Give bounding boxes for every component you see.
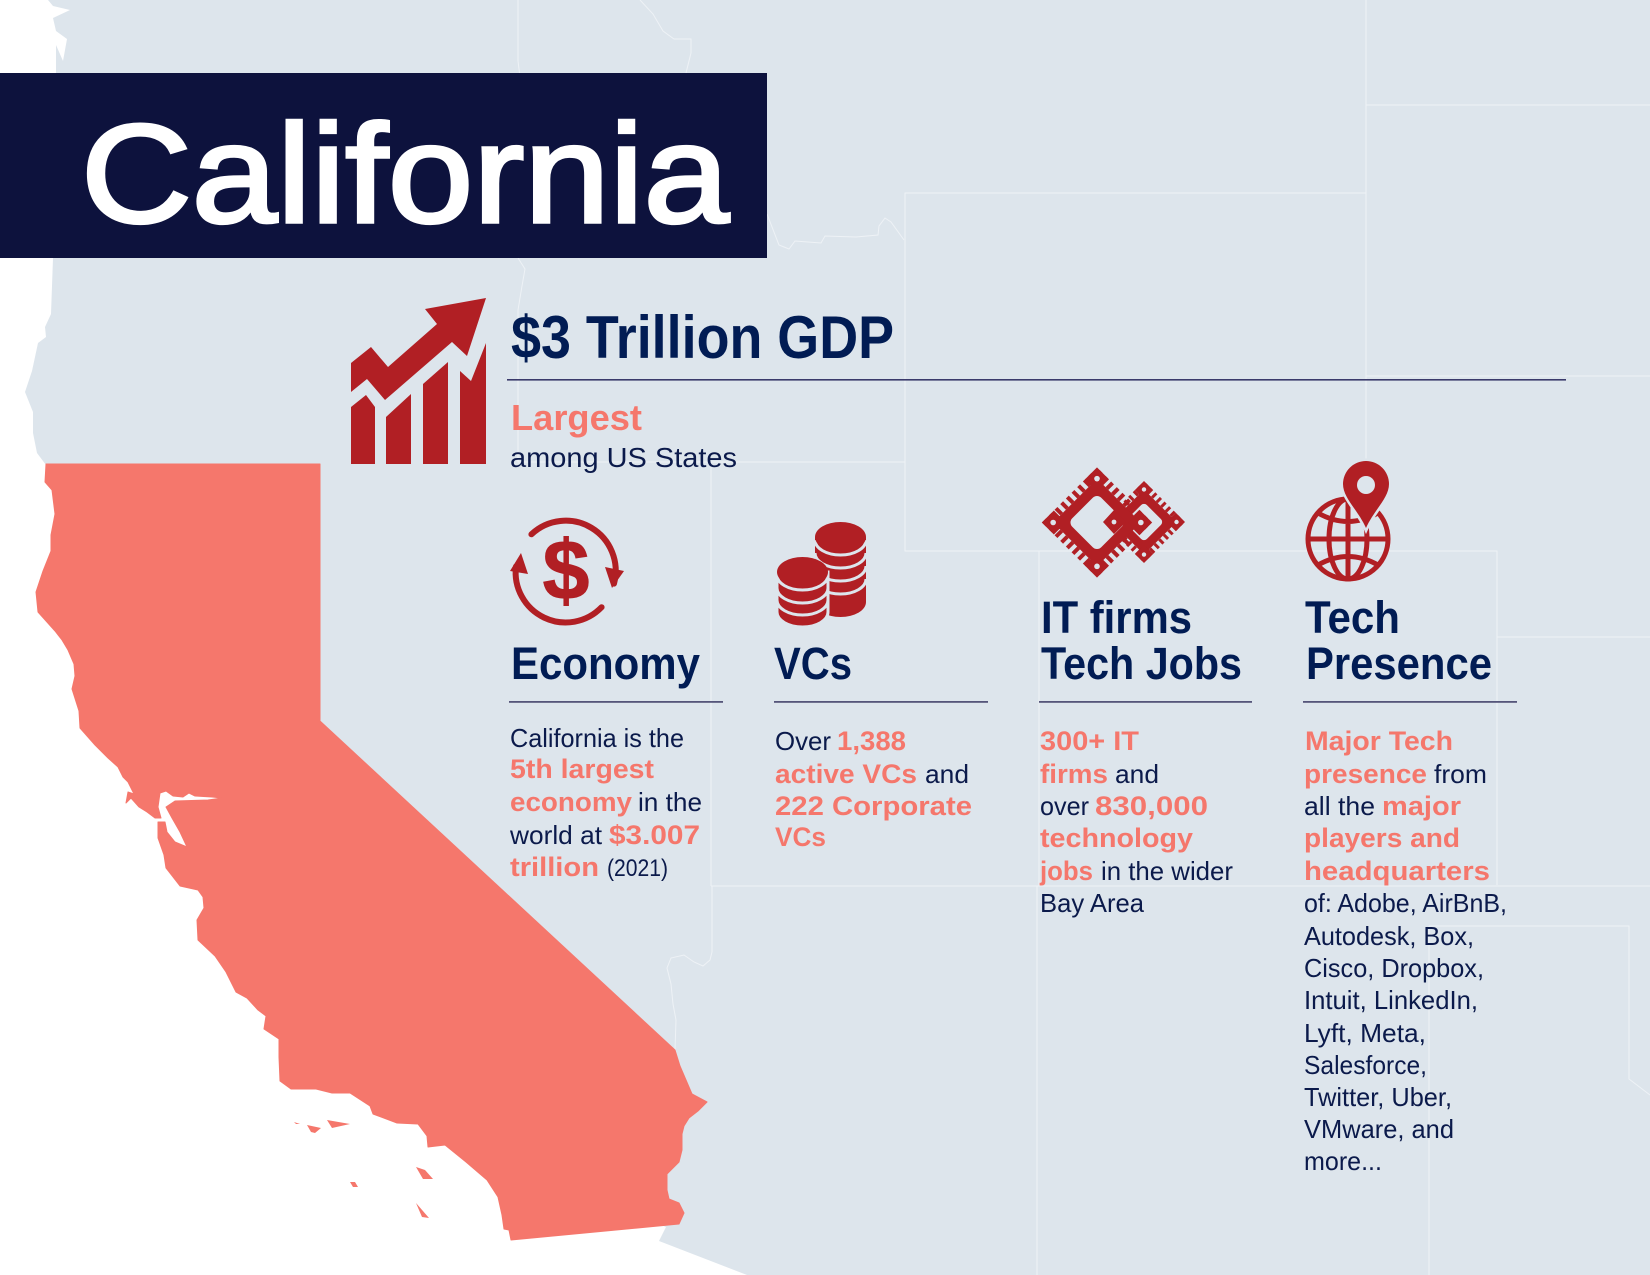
Tech Presence body bbox=[1304, 726, 1507, 1176]
Tech Presence body: Lyft, Meta, bbox=[1304, 1018, 1426, 1048]
map: California state bbox=[36, 464, 707, 1240]
IT firms heading: IT firms bbox=[1041, 592, 1192, 643]
Tech Presence body: of: Adobe, AirBnB, bbox=[1304, 888, 1507, 918]
Tech Presence body: Major Tech bbox=[1305, 726, 1453, 756]
IT firms body: Bay Area bbox=[1040, 888, 1145, 918]
title banner: California bbox=[81, 95, 729, 252]
Economy divider bbox=[509, 701, 723, 703]
icon: rising bar chart with arrow bbox=[351, 298, 486, 464]
title banner bbox=[0, 73, 767, 258]
column: Economy bbox=[509, 638, 723, 882]
Economy heading: Economy bbox=[511, 638, 700, 689]
Economy body: economy bbox=[510, 787, 632, 817]
Tech Presence body: all the bbox=[1304, 791, 1375, 821]
Economy body bbox=[509, 723, 702, 882]
IT firms divider bbox=[1039, 701, 1252, 703]
IT firms body bbox=[1039, 726, 1233, 918]
IT firms body: 830,000 bbox=[1095, 791, 1208, 821]
Tech Presence heading bbox=[1305, 592, 1492, 689]
IT firms body: 300+ IT bbox=[1040, 726, 1140, 756]
Tech Presence body: Autodesk, Box, bbox=[1304, 921, 1474, 951]
IT firms heading bbox=[1041, 592, 1242, 689]
VCs body: Over bbox=[775, 726, 831, 756]
icon: coin stacks bbox=[777, 522, 866, 627]
column: VCs bbox=[774, 638, 988, 852]
IT firms body: technology bbox=[1040, 823, 1193, 853]
Tech Presence divider bbox=[1303, 701, 1517, 703]
icon: linked microchips bbox=[1042, 467, 1185, 578]
Economy body: trillion bbox=[510, 852, 599, 882]
Tech Presence body: Salesforce, bbox=[1304, 1050, 1427, 1080]
VCs body: VCs bbox=[775, 822, 826, 852]
VCs heading: VCs bbox=[774, 638, 852, 689]
IT firms heading: Tech Jobs bbox=[1041, 638, 1242, 689]
GDP subtext bbox=[510, 397, 737, 473]
Tech Presence body: from bbox=[1434, 759, 1487, 789]
Tech Presence body: more... bbox=[1304, 1146, 1382, 1176]
VCs divider bbox=[774, 701, 988, 703]
IT firms body: and bbox=[1115, 759, 1159, 789]
Economy body: world at bbox=[509, 820, 603, 850]
column: IT firms and tech jobs bbox=[1039, 592, 1252, 918]
IT firms body: jobs bbox=[1039, 856, 1093, 886]
Economy body: $3.007 bbox=[609, 820, 700, 850]
icon: dollar with circular arrows: $ bbox=[543, 523, 589, 617]
VCs body bbox=[775, 726, 972, 852]
Tech Presence body: players and bbox=[1304, 823, 1460, 853]
column: Tech Presence bbox=[1303, 592, 1517, 1176]
Tech Presence body: headquarters bbox=[1304, 856, 1490, 886]
Tech Presence body: VMware, and bbox=[1304, 1114, 1454, 1144]
Economy body: California is the bbox=[510, 723, 684, 753]
VCs body: active VCs bbox=[775, 759, 917, 789]
Tech Presence heading: Presence bbox=[1306, 638, 1492, 689]
GDP subtext: Largest bbox=[511, 397, 642, 438]
Tech Presence body: Cisco, Dropbox, bbox=[1304, 953, 1484, 983]
Economy body: in the bbox=[638, 787, 702, 817]
Tech Presence body: Intuit, LinkedIn, bbox=[1304, 985, 1478, 1015]
Economy body: 5th largest bbox=[510, 754, 654, 784]
Tech Presence body: Twitter, Uber, bbox=[1304, 1082, 1452, 1112]
IT firms body: firms bbox=[1040, 759, 1108, 789]
Tech Presence heading: Tech bbox=[1305, 592, 1400, 643]
VCs body: 222 Corporate bbox=[775, 791, 972, 821]
GDP subtext: among US States bbox=[510, 442, 737, 473]
Tech Presence body: presence bbox=[1304, 759, 1427, 789]
GDP heading: $3 Trillion GDP bbox=[511, 304, 894, 371]
icon: globe with location pin bbox=[1308, 461, 1389, 579]
Economy body: (2021) bbox=[607, 855, 668, 882]
icon: dollar with circular arrows bbox=[510, 521, 624, 622]
VCs body: and bbox=[925, 759, 969, 789]
Tech Presence body: major bbox=[1382, 791, 1462, 821]
GDP divider bbox=[507, 379, 1566, 381]
IT firms body: in the wider bbox=[1101, 856, 1233, 886]
VCs body: 1,388 bbox=[837, 726, 906, 756]
IT firms body: over bbox=[1040, 791, 1089, 821]
